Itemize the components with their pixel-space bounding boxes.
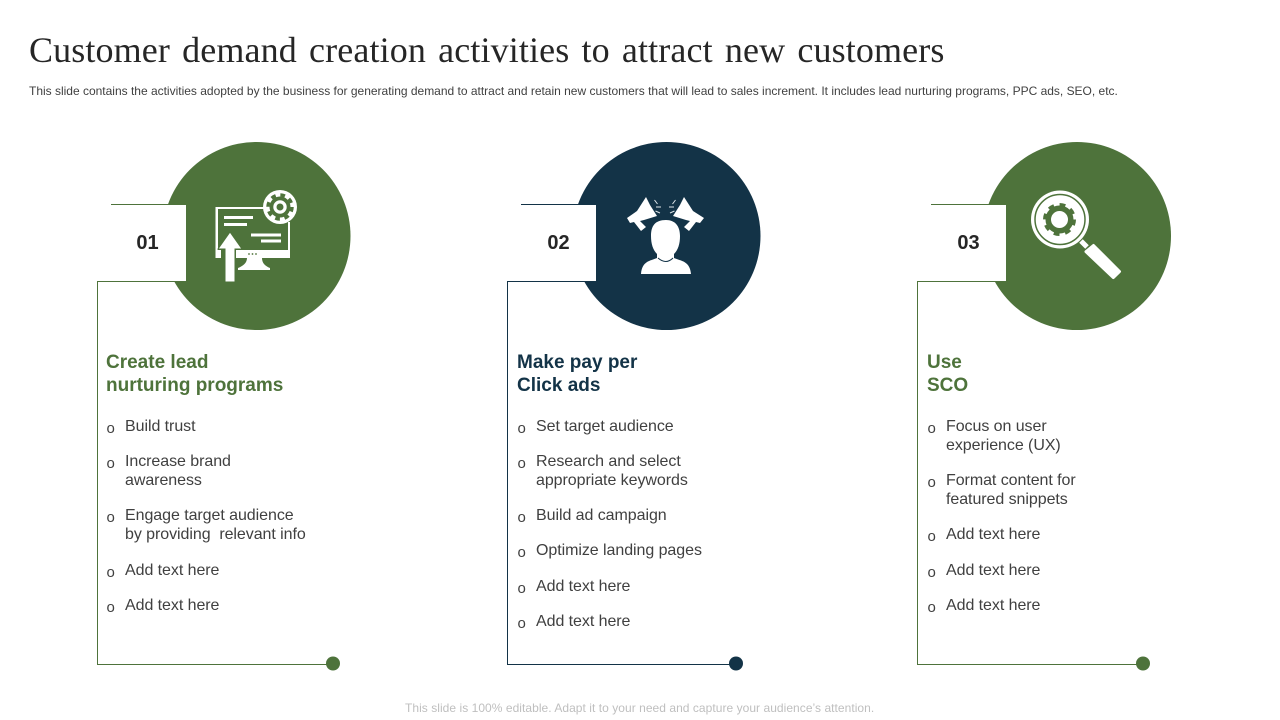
number box 03 (931, 204, 1006, 281)
bullet list: column 3: o (928, 420, 936, 437)
bullet list: column 1: Engage target audience (125, 507, 294, 524)
number 03: 03 (957, 232, 980, 254)
number box 01 (111, 204, 186, 281)
bullet list: column 3: Focus on user (946, 418, 1047, 435)
connector 01 (98, 282, 340, 670)
bullet list: column 3: o (928, 564, 936, 581)
bullet list: column 2: o (518, 420, 526, 437)
heading: column 2 (517, 352, 638, 396)
bullet list: column 1: Add text here (125, 597, 219, 614)
bullet list: column 3: o (928, 599, 936, 616)
bullet list: column 3: Add text here (946, 526, 1040, 543)
number 02: 02 (547, 232, 570, 254)
bullet list: column 2: o (518, 615, 526, 632)
bullet list: column 1 (106, 418, 306, 616)
bullet list: column 2: Optimize landing pages (536, 542, 702, 559)
bullet list: column 2: Build ad campaign (536, 507, 667, 524)
bullet list: column 3: Format content for (946, 472, 1076, 489)
bullet list: column 2: Set target audience (536, 418, 674, 435)
bullet list: column 2: o (518, 509, 526, 526)
heading: column 3 (927, 352, 968, 396)
bullet list: column 3: o (928, 474, 936, 491)
connector 03 (918, 282, 1150, 670)
heading: column 2: Click ads (517, 375, 600, 396)
bullet list: column 2: appropriate keywords (536, 472, 688, 489)
bullet list: column 1: o (106, 455, 115, 472)
bullet list: column 2: o (518, 455, 526, 472)
icon: person with megaphones (627, 197, 704, 274)
circle 03 (983, 142, 1171, 330)
number box 02 (521, 204, 596, 281)
heading: column 1: nurturing programs (106, 375, 283, 396)
bullet list: column 3: o (928, 528, 936, 545)
icon: monitor with gear and arrow (216, 190, 297, 282)
bullet list: column 3: Add text here (946, 597, 1040, 614)
heading: column 3: Use (927, 352, 962, 373)
bullet list: column 1: o (106, 509, 115, 526)
bullet list: column 1: o (106, 420, 115, 437)
heading: column 1 (106, 352, 283, 396)
footer note: This slide is 100% editable. Adapt it to your need and capture your audience’s attention. (405, 701, 874, 715)
bullet list: column 1: o (106, 564, 115, 581)
heading: column 2: Make pay per (517, 352, 637, 373)
bullet list: column 2 (518, 418, 702, 632)
bullet list: column 1: Build trust (125, 418, 195, 435)
heading: column 3: SCO (927, 375, 968, 396)
bullet list: column 2: Add text here (536, 613, 630, 630)
bullet list: column 1: by providing relevant info (125, 526, 306, 543)
bullet list: column 2: o (518, 544, 526, 561)
bullet list: column 2: o (518, 580, 526, 597)
circle 02 (572, 142, 760, 330)
bullet list: column 2: Research and select (536, 453, 681, 470)
circle 01 (162, 142, 350, 330)
subtitle: This slide contains the activities adopted by the business for generating demand to attract and retain new customers that will lead to sales increment. It includes lead nurturing programs, PPC ads, SEO, etc. (29, 84, 1118, 98)
bullet list: column 1: o (106, 599, 115, 616)
bullet list: column 3: experience (UX) (946, 437, 1061, 454)
icon: magnifier with gear (1031, 190, 1120, 278)
bullet list: column 3: featured snippets (946, 491, 1068, 508)
title: Customer demand creation activities to attract new customers (29, 30, 945, 70)
bullet list: column 3 (928, 418, 1076, 616)
bullet list: column 2: Add text here (536, 578, 630, 595)
connector 02 (508, 282, 743, 670)
bullet list: column 3: Add text here (946, 562, 1040, 579)
bullet list: column 1: awareness (125, 472, 202, 489)
heading: column 1: Create lead (106, 352, 208, 373)
bullet list: column 1: Add text here (125, 562, 219, 579)
bullet list: column 1: Increase brand (125, 453, 231, 470)
number 01: 01 (136, 232, 159, 254)
